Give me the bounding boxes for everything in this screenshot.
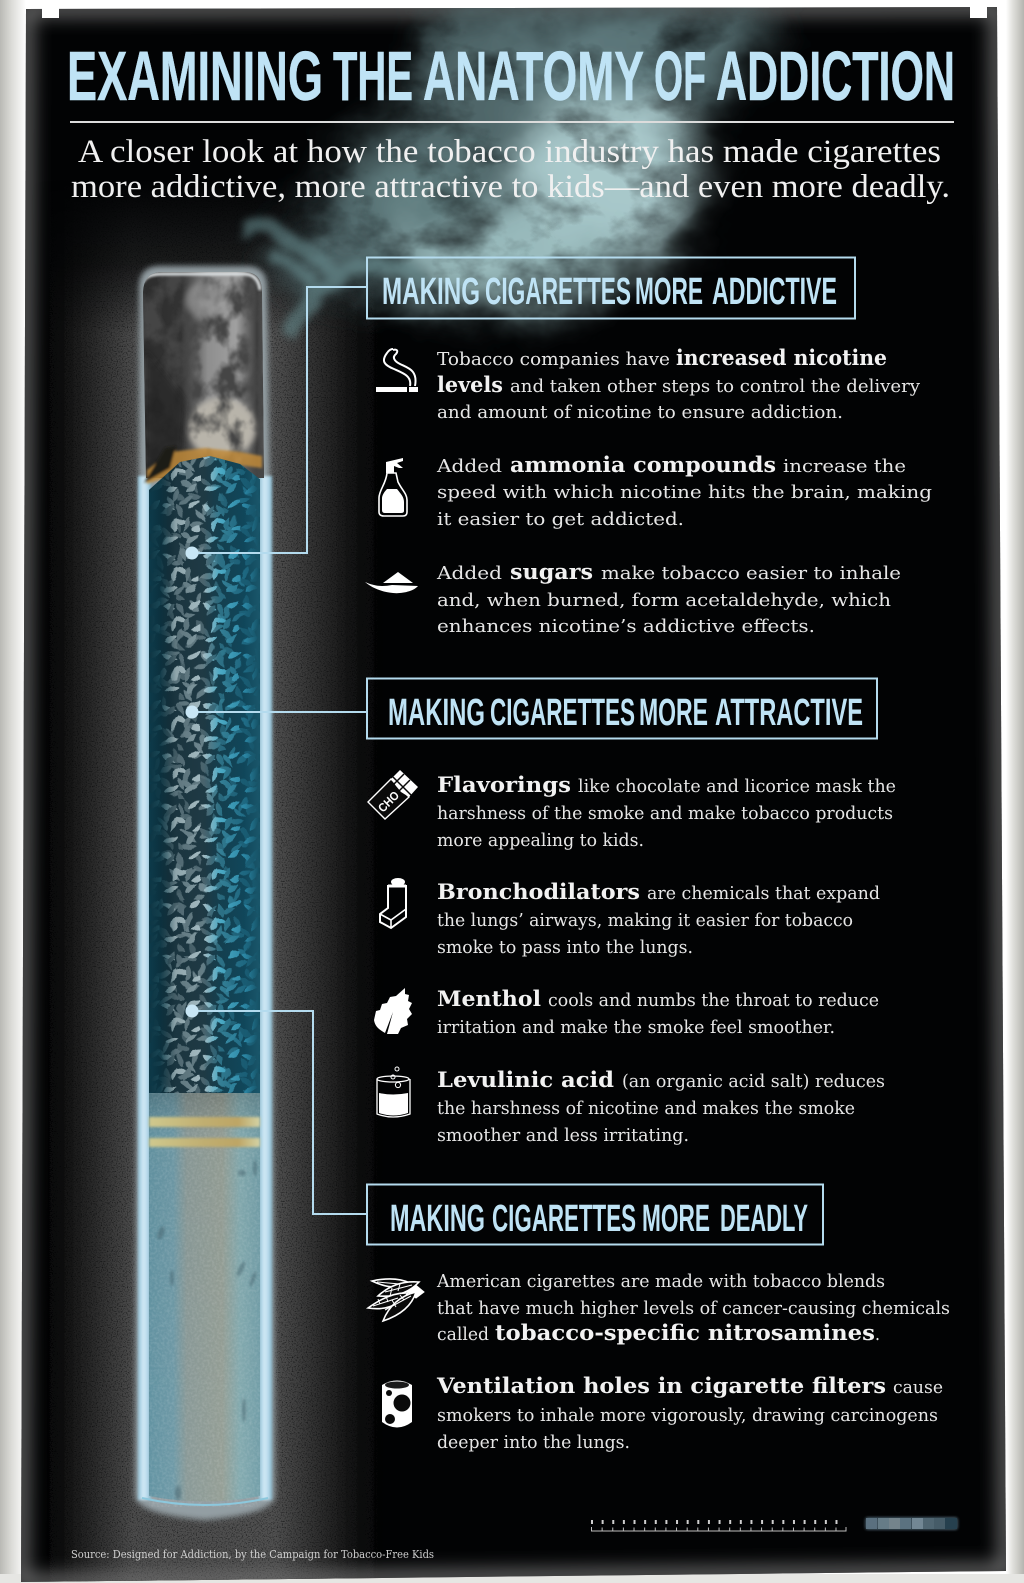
heading: more attractive: ATTRACTIVE: [715, 692, 863, 734]
title: [67, 37, 955, 115]
text: sugars: Added: [436, 563, 502, 584]
burn line: [144, 446, 262, 484]
icon: chocolate bar: CHO: [375, 788, 402, 815]
text: ammonia: it easier to get addicted.: [437, 509, 684, 530]
text: nitrosamines: tobacco-specific nitrosamines: [495, 1321, 875, 1346]
text: ammonia: ammonia compounds: [510, 453, 776, 478]
heading: more addictive: [367, 258, 855, 318]
icon: sugar spoon: [365, 572, 418, 593]
tobacco core: [149, 456, 261, 1094]
mounting tabs: [42, 0, 987, 18]
text: nitrosamines: that have much higher levels of cancer-causing chemicals: [437, 1298, 950, 1319]
text: flavorings: harshness of the smoke and make tobacco products: [437, 803, 893, 824]
text: ventilation holes: Ventilation holes in cigarette filters: [436, 1374, 886, 1399]
burnt ash tip: [143, 272, 264, 478]
panel: more addictive: [365, 258, 932, 637]
text: flavorings: like chocolate and licorice mask the: [578, 776, 896, 797]
text: bronchodilators: [437, 880, 880, 958]
text: ventilation holes: smokers to inhale more vigorously, drawing carcinogens: [437, 1405, 938, 1426]
text: nitrosamines: American cigarettes are made with tobacco blends: [436, 1271, 885, 1292]
text: sugars: sugars: [510, 560, 593, 585]
cigarette illustration: [135, 266, 275, 1520]
heading: more attractive: [367, 678, 877, 738]
subtitle: A closer look at how the tobacco industry has made cigarettes: [78, 134, 941, 170]
heading: more deadly: DEADLY: [720, 1198, 808, 1240]
smoke plume: [270, 10, 780, 310]
heading: more attractive: CIGARETTES: [490, 692, 635, 734]
icon: menthol leaf: [374, 988, 412, 1034]
text: levulinic acid: Levulinic acid: [437, 1068, 614, 1093]
text: flavorings: Flavorings: [437, 773, 571, 798]
text: nitrosamines: [436, 1271, 950, 1346]
heading: more attractive: MAKING: [388, 692, 485, 734]
text: bronchodilators: smoke to pass into the lungs.: [437, 937, 693, 958]
text: ventilation holes: deeper into the lungs.: [437, 1432, 630, 1453]
text: nicotine: increased nicotine: [676, 346, 887, 371]
text: levulinic acid: smoother and less irritating.: [437, 1125, 689, 1146]
icon: acid beaker: [377, 1067, 410, 1117]
icon: inhaler: [380, 878, 406, 928]
filter tip: [149, 1093, 260, 1502]
text: ammonia: [436, 453, 932, 530]
icon: spray bottle: [379, 458, 407, 516]
text: nitrosamines: called: [437, 1324, 489, 1345]
glass tube bands: [138, 476, 272, 1500]
heading: more addictive: CIGARETTES: [485, 271, 631, 313]
heading: more addictive: MAKING: [382, 271, 480, 313]
heading: more deadly: [367, 1184, 823, 1244]
heading: more addictive: MORE: [635, 271, 703, 313]
text: sugars: and, when burned, form acetaldehyde, which: [437, 590, 891, 611]
text: ventilation holes: [436, 1374, 943, 1453]
text: bronchodilators: are chemicals that expand: [647, 883, 880, 904]
title: EXAMINING: [67, 37, 323, 115]
text: sugars: [436, 560, 901, 637]
text: nicotine: [437, 346, 921, 423]
connector: addictive: [192, 287, 367, 553]
subtitle: [71, 134, 950, 205]
text: menthol: Menthol: [437, 987, 541, 1012]
connector dots: [186, 546, 198, 1018]
text: levulinic acid: the harshness of nicotine and makes the smoke: [437, 1098, 855, 1119]
icon: cigarette smoke: [376, 349, 418, 392]
text: nicotine: levels: [437, 373, 503, 398]
heading: more attractive: MORE: [639, 692, 708, 734]
smoke wisps: [240, 231, 420, 335]
text: nicotine: Tobacco companies have: [437, 349, 670, 370]
text: bronchodilators: Bronchodilators: [437, 880, 640, 905]
print colour swatch: [865, 1517, 958, 1530]
text: ammonia: Added: [436, 456, 502, 477]
title: THE: [333, 37, 413, 115]
text: nicotine: and taken other steps to control the delivery: [510, 376, 921, 397]
title: ANATOMY: [423, 37, 644, 115]
panel: more deadly: [367, 1184, 950, 1453]
source note: Source: Designed for Addiction, by the Campaign for Tobacco-Free Kids: [71, 1547, 434, 1561]
connector: deadly: [192, 1011, 367, 1214]
text: ammonia: increase the: [783, 456, 906, 477]
text: ammonia: speed with which nicotine hits the brain, making: [437, 482, 932, 503]
text: menthol: cools and numbs the throat to reduce: [548, 990, 879, 1011]
text: sugars: enhances nicotine’s addictive effects.: [437, 616, 815, 637]
text: nicotine: and amount of nicotine to ensure addiction.: [437, 402, 843, 423]
heading: more deadly: CIGARETTES: [492, 1198, 636, 1240]
print scale marks: [591, 1522, 846, 1531]
text: bronchodilators: the lungs’ airways, making it easier for tobacco: [437, 910, 853, 931]
icon: ventilated filter: [382, 1380, 412, 1428]
cigarette glow: [135, 266, 275, 1520]
icon: tobacco leaves: [368, 1279, 424, 1321]
text: ventilation holes: cause: [893, 1377, 943, 1398]
panel: more attractive: [367, 678, 896, 1146]
text: menthol: [437, 987, 879, 1038]
icon: chocolate bar: [368, 770, 418, 819]
title: OF: [654, 37, 706, 115]
subtitle: more addictive, more attractive to kids—and even more deadly.: [71, 169, 950, 205]
text: flavorings: more appealing to kids.: [437, 830, 644, 851]
connector: attractive: [192, 711, 367, 713]
heading: more deadly: MAKING: [390, 1198, 485, 1240]
heading: more deadly: MORE: [642, 1198, 710, 1240]
text: nitrosamines: .: [875, 1324, 880, 1345]
text: levulinic acid: [437, 1068, 885, 1146]
text: sugars: make tobacco easier to inhale: [601, 563, 901, 584]
text: flavorings: [437, 773, 896, 851]
heading: more addictive: ADDICTIVE: [712, 271, 837, 313]
text: menthol: irritation and make the smoke feel smoother.: [437, 1017, 835, 1038]
text: levulinic acid: (an organic acid salt) reduces: [622, 1071, 885, 1092]
